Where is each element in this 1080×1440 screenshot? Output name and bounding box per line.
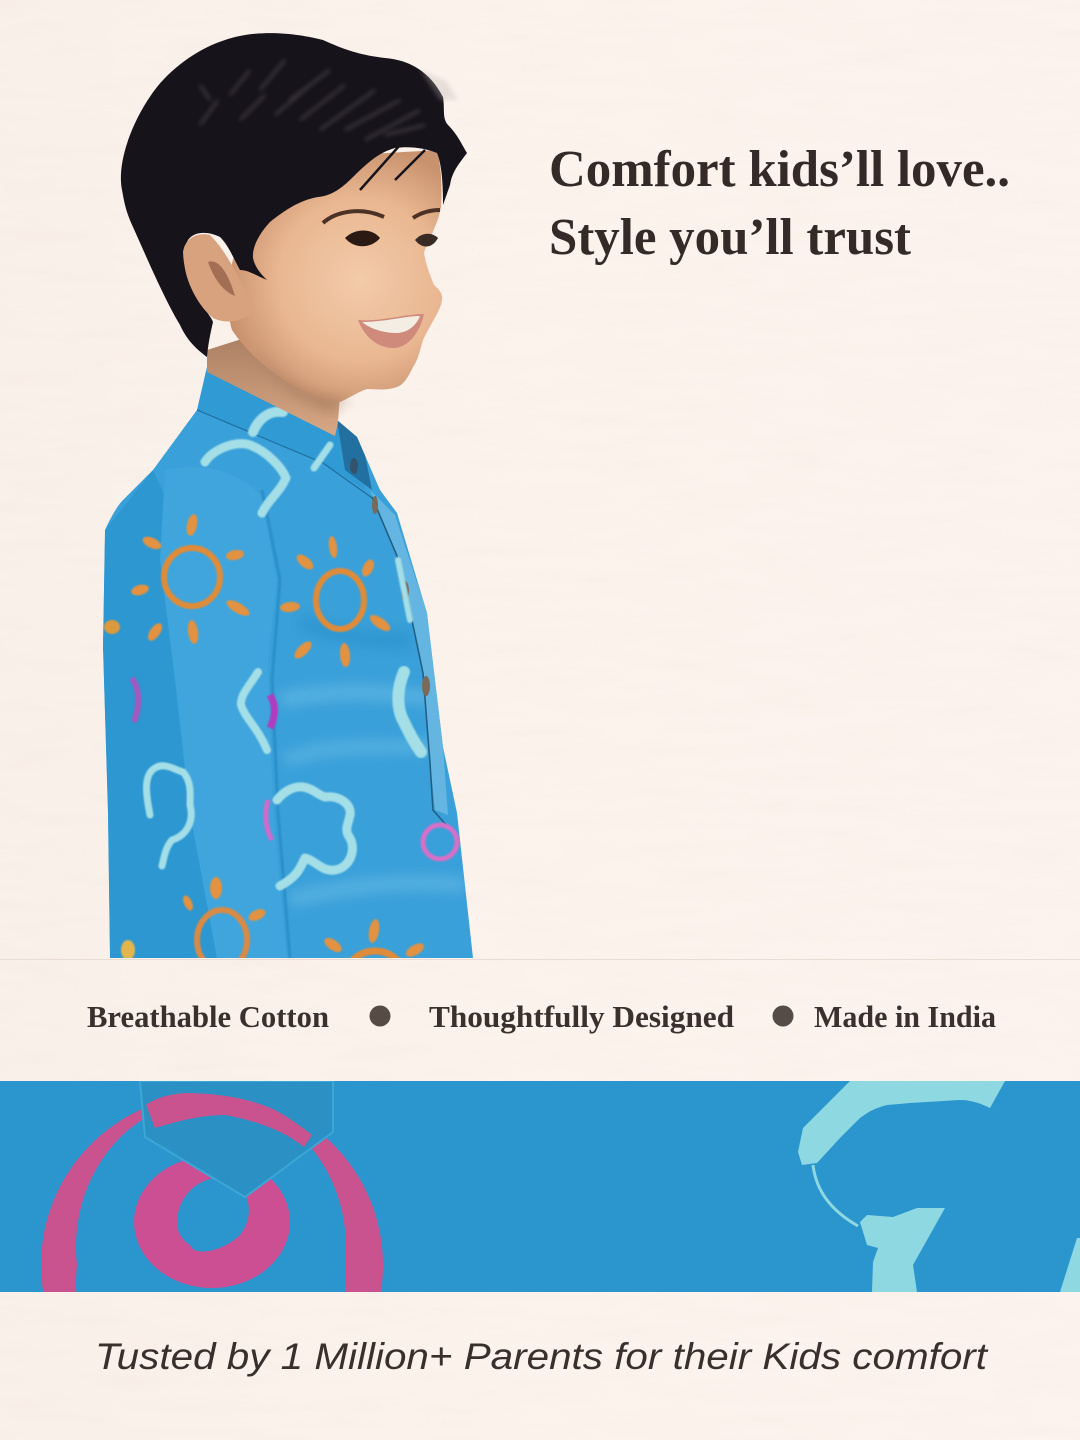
body shading (280, 620, 465, 900)
sleeve light panel (160, 494, 187, 771)
neck shadow under jaw (268, 365, 351, 414)
eyes (323, 210, 440, 247)
heading: Style you’ll trust (549, 209, 912, 266)
sleeve seam shadow (262, 490, 290, 958)
pink outer ring (41, 1109, 383, 1292)
hair (121, 33, 467, 357)
sun print: chest (280, 536, 393, 667)
placket (370, 490, 448, 815)
features row: Breathable Cotton (87, 999, 329, 1034)
fabric band (0, 1081, 1080, 1292)
boy photo illustration (100, 33, 480, 999)
heading (549, 141, 1010, 266)
hair highlights (200, 60, 425, 140)
tagline: Tusted by 1 Million+ Parents for their Kids comfort (95, 1336, 989, 1377)
features row: Thoughtfully Designed (429, 999, 734, 1034)
sun print: sleeve (130, 513, 252, 645)
ear (183, 234, 250, 321)
sun print: sleeve lower (182, 876, 266, 958)
pink prints (132, 678, 457, 859)
cloud print (798, 1081, 1005, 1165)
mouth (358, 314, 424, 348)
buttons (350, 458, 430, 696)
face (228, 150, 442, 403)
cloud prints (146, 412, 421, 886)
pink print on flap (146, 1093, 312, 1147)
pink inner ring (134, 1156, 290, 1288)
fringe strands (360, 145, 425, 190)
collar (197, 367, 365, 490)
stray grey tuft (420, 70, 458, 100)
neck (207, 330, 340, 436)
pocket flap (140, 1081, 333, 1197)
left sleeve back (103, 470, 217, 958)
features row: Made in India (814, 999, 996, 1034)
divider line (0, 959, 1080, 960)
features row (87, 999, 996, 1034)
kurta shirt (100, 360, 480, 999)
sun print: hem (104, 619, 425, 958)
heading: Comfort kids’ll love.. (549, 141, 1010, 198)
